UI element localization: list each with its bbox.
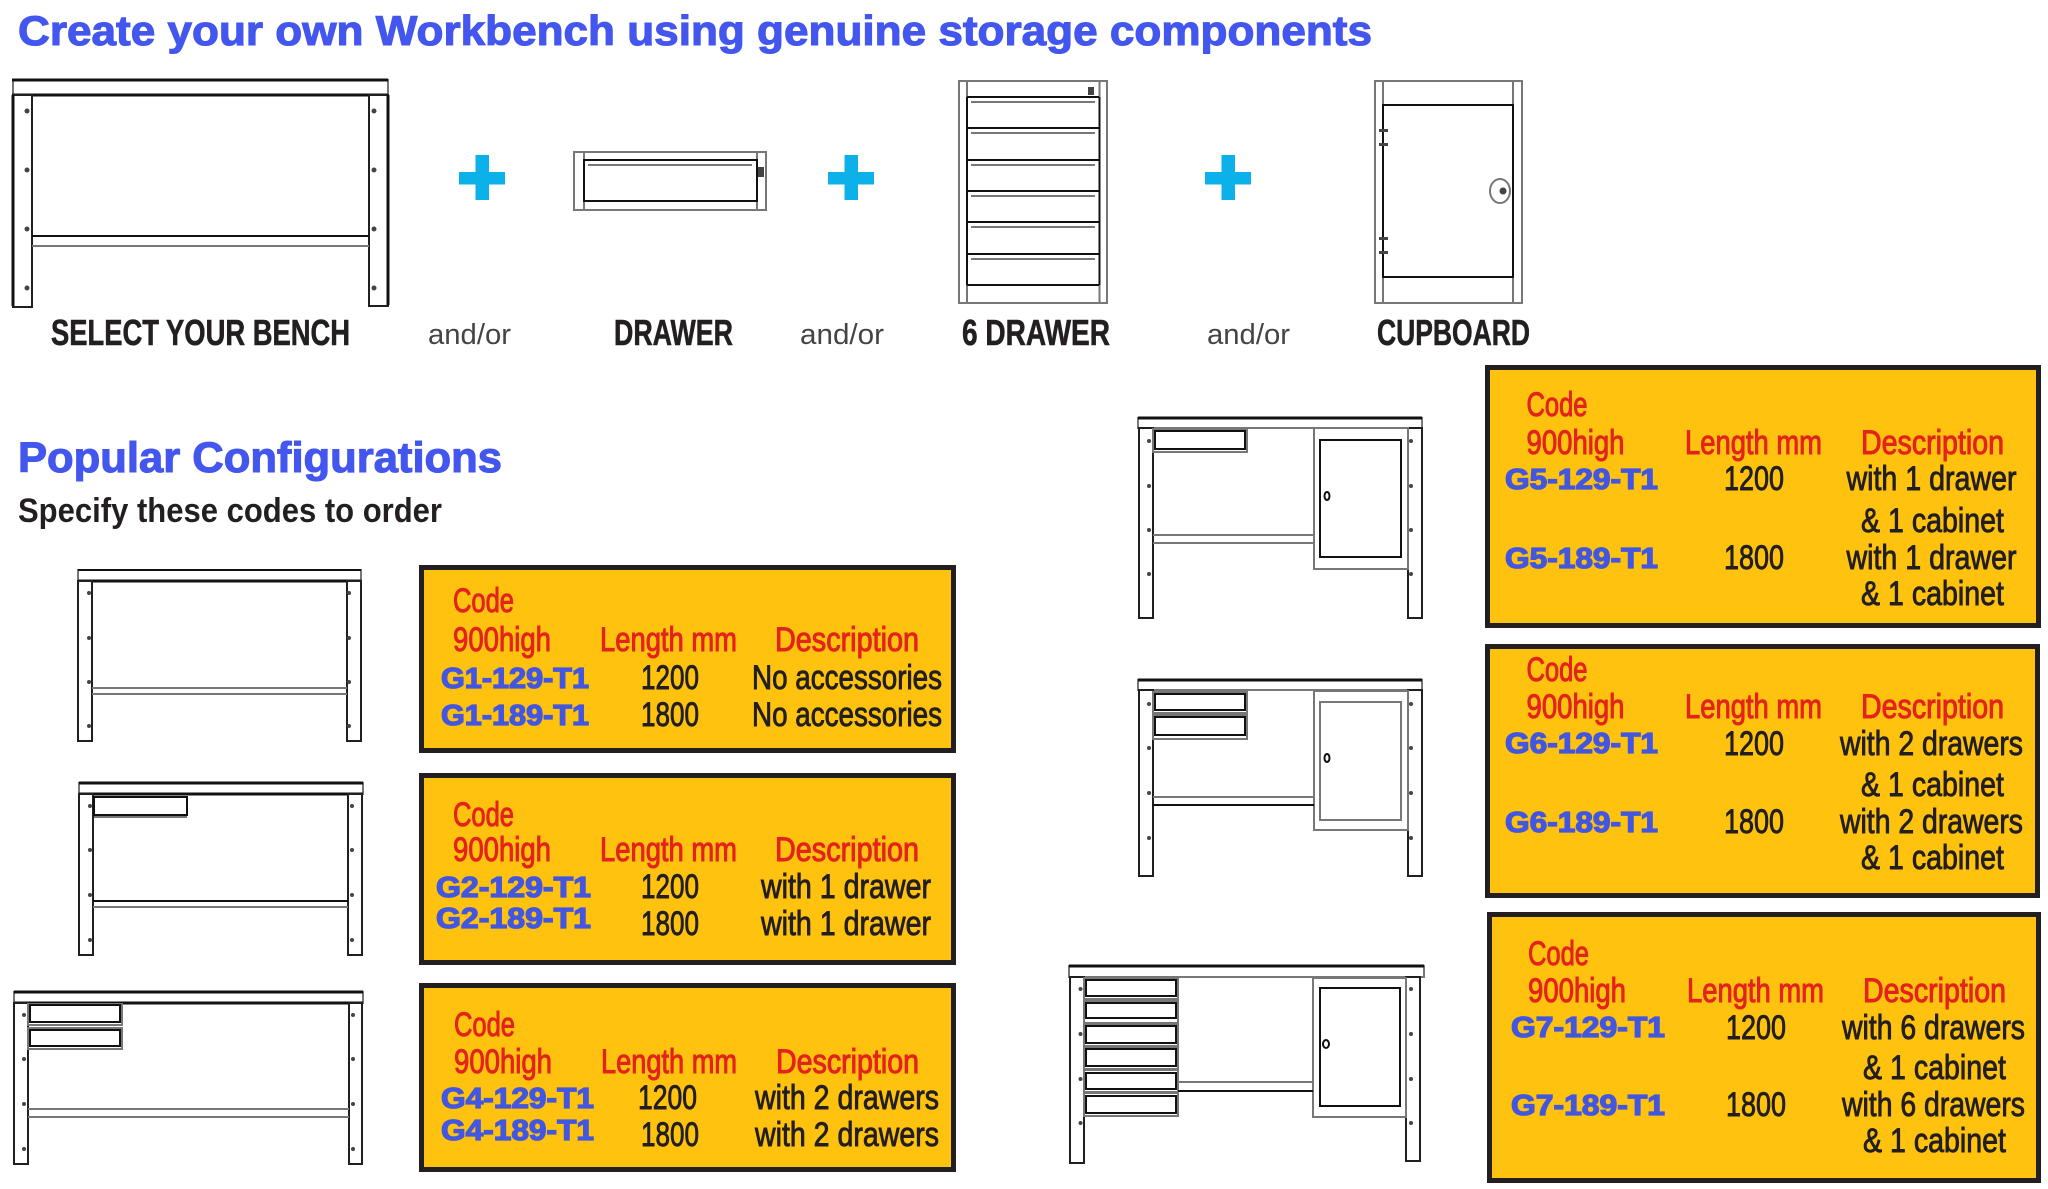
column headers xyxy=(453,796,919,869)
column headers: 900high xyxy=(453,621,551,659)
row: G7-129-T1: & 1 cabinet xyxy=(1863,1049,2006,1087)
panel background xyxy=(1490,914,2038,1180)
panel: G2 table xyxy=(422,776,954,962)
row: G2-129-T1: G2-129-T1 xyxy=(436,872,591,904)
panel background xyxy=(422,568,954,750)
and/or 3: and/or xyxy=(1207,319,1290,351)
row: G7-189-T1: G7-189-T1 xyxy=(1511,1090,1665,1122)
row: G6-129-T1: G6-129-T1 xyxy=(1505,728,1658,760)
column headers: 900high xyxy=(453,831,551,869)
column headers: Length mm xyxy=(600,831,737,869)
row: G6-189-T1: G6-189-T1 xyxy=(1505,807,1658,839)
row: G1-129-T1: 1200 xyxy=(641,659,699,697)
row: G7-129-T1: G7-129-T1 xyxy=(1511,1012,1665,1044)
row: G4-129-T1: G4-129-T1 xyxy=(441,1083,594,1115)
and/or 2: and/or xyxy=(800,319,884,351)
column headers xyxy=(1528,935,2006,1010)
row: G5-189-T1: 1800 xyxy=(1724,539,1784,577)
row: G5-129-T1: 1200 xyxy=(1724,460,1784,498)
panel: G4 table xyxy=(422,986,954,1170)
column headers: Length mm xyxy=(1687,972,1824,1010)
row: G1-189-T1: 1800 xyxy=(641,696,699,734)
subheading: Specify these codes to order xyxy=(18,492,442,530)
icon: drawer xyxy=(574,152,766,210)
panel background xyxy=(422,776,954,962)
row: G7-129-T1: 1200 xyxy=(1726,1009,1786,1047)
row: G4-189-T1: 1800 xyxy=(641,1116,699,1154)
column headers: 900high xyxy=(1526,424,1624,462)
panel: G6 table xyxy=(1488,646,2038,896)
row: G7-189-T1: & 1 cabinet xyxy=(1863,1122,2006,1160)
row: G6-129-T1 xyxy=(1505,725,2023,804)
label: drawer: DRAWER xyxy=(614,312,733,353)
row: G2-189-T1: with 1 drawer xyxy=(760,905,931,943)
row: G5-129-T1 xyxy=(1505,460,2016,540)
column headers: 900high xyxy=(1528,972,1626,1010)
column headers: Length mm xyxy=(601,1043,737,1081)
row: G5-189-T1 xyxy=(1505,539,2016,613)
panel: G7 table xyxy=(1490,914,2038,1180)
row: G6-189-T1: 1800 xyxy=(1724,803,1784,841)
row: G5-189-T1: & 1 cabinet xyxy=(1861,575,2004,613)
column headers: Code xyxy=(1526,386,1588,424)
row: G1-189-T1: G1-189-T1 xyxy=(441,700,589,732)
column headers: Code xyxy=(1528,935,1589,973)
bench G5 xyxy=(1138,418,1422,618)
row: G6-129-T1: 1200 xyxy=(1724,725,1784,763)
icon: 6 drawer xyxy=(959,81,1107,303)
row: G2-189-T1: 1800 xyxy=(641,905,699,943)
label: cupboard: CUPBOARD xyxy=(1377,312,1530,353)
panel background xyxy=(1488,646,2038,896)
label: select your bench: SELECT YOUR BENCH xyxy=(51,312,350,353)
row: G7-189-T1: 1800 xyxy=(1726,1086,1786,1124)
row: G5-129-T1: G5-129-T1 xyxy=(1505,464,1658,496)
column headers: 900high xyxy=(454,1043,552,1081)
column headers: Code xyxy=(1526,651,1588,689)
column headers: Code xyxy=(454,1006,515,1044)
bench G1 xyxy=(78,570,361,741)
icon: plus 1 xyxy=(459,155,505,200)
column headers: Code xyxy=(453,796,514,834)
column headers: Code xyxy=(453,582,514,620)
row: G2-189-T1 xyxy=(436,903,931,943)
panel: G5 table xyxy=(1488,368,2038,626)
column headers xyxy=(1526,386,2004,462)
row: G4-129-T1: with 2 drawers xyxy=(754,1079,939,1117)
column headers xyxy=(453,582,919,659)
row: G4-189-T1: with 2 drawers xyxy=(754,1116,939,1154)
icon: plus 2 xyxy=(828,155,874,200)
row: G4-189-T1: G4-189-T1 xyxy=(441,1115,594,1147)
row: G5-189-T1: G5-189-T1 xyxy=(1505,543,1658,575)
row: G1-129-T1: G1-129-T1 xyxy=(441,663,589,695)
column headers: Description xyxy=(1861,688,2004,726)
column headers: Description xyxy=(775,831,919,869)
icon: cupboard xyxy=(1375,81,1522,303)
row: G7-189-T1 xyxy=(1511,1086,2025,1160)
panel background xyxy=(1488,368,2038,626)
bench G6 xyxy=(1138,680,1422,876)
row: G1-129-T1: No accessories xyxy=(752,659,942,697)
row: G2-189-T1: G2-189-T1 xyxy=(436,903,591,935)
heading: popular configurations: Popular Configurations xyxy=(18,434,502,482)
row: G2-129-T1: 1200 xyxy=(641,868,699,906)
column headers: Length mm xyxy=(600,621,737,659)
column headers: Description xyxy=(1861,424,2004,462)
row: G5-129-T1: & 1 cabinet xyxy=(1861,502,2004,540)
label: 6 drawer: 6 DRAWER xyxy=(962,312,1110,353)
panel background xyxy=(422,986,954,1170)
bench G2 xyxy=(79,783,363,955)
row: G4-189-T1 xyxy=(441,1115,939,1154)
column headers: Description xyxy=(776,1043,919,1081)
column headers: Length mm xyxy=(1685,688,1822,726)
icon: plus 3 xyxy=(1205,155,1251,200)
bench G7 xyxy=(1069,966,1424,1163)
and/or 1: and/or xyxy=(428,319,511,351)
row: G4-129-T1: 1200 xyxy=(638,1079,697,1117)
icon: select your bench xyxy=(12,80,388,307)
row: G5-189-T1: with 1 drawer xyxy=(1846,539,2016,577)
panel: G1 table xyxy=(422,568,954,750)
row: G6-189-T1 xyxy=(1505,803,2023,877)
row: G5-129-T1: with 1 drawer xyxy=(1846,460,2016,498)
bench G4 xyxy=(14,992,363,1164)
row: G1-189-T1: No accessories xyxy=(752,696,942,734)
row: G6-129-T1: & 1 cabinet xyxy=(1861,766,2004,804)
row: G7-129-T1 xyxy=(1511,1009,2025,1087)
column headers xyxy=(454,1006,919,1081)
row: G2-129-T1 xyxy=(436,868,931,906)
row: G1-189-T1 xyxy=(441,696,942,734)
column headers: 900high xyxy=(1526,688,1624,726)
column headers xyxy=(1526,651,2004,726)
row: G2-129-T1: with 1 drawer xyxy=(760,868,931,906)
title: Create your own Workbench using genuine storage components xyxy=(18,7,1372,54)
row: G6-189-T1: & 1 cabinet xyxy=(1861,839,2004,877)
column headers: Length mm xyxy=(1685,424,1822,462)
column headers: Description xyxy=(775,621,919,659)
column headers: Description xyxy=(1863,972,2006,1010)
row: G4-129-T1 xyxy=(441,1079,939,1117)
row: G1-129-T1 xyxy=(441,659,942,697)
